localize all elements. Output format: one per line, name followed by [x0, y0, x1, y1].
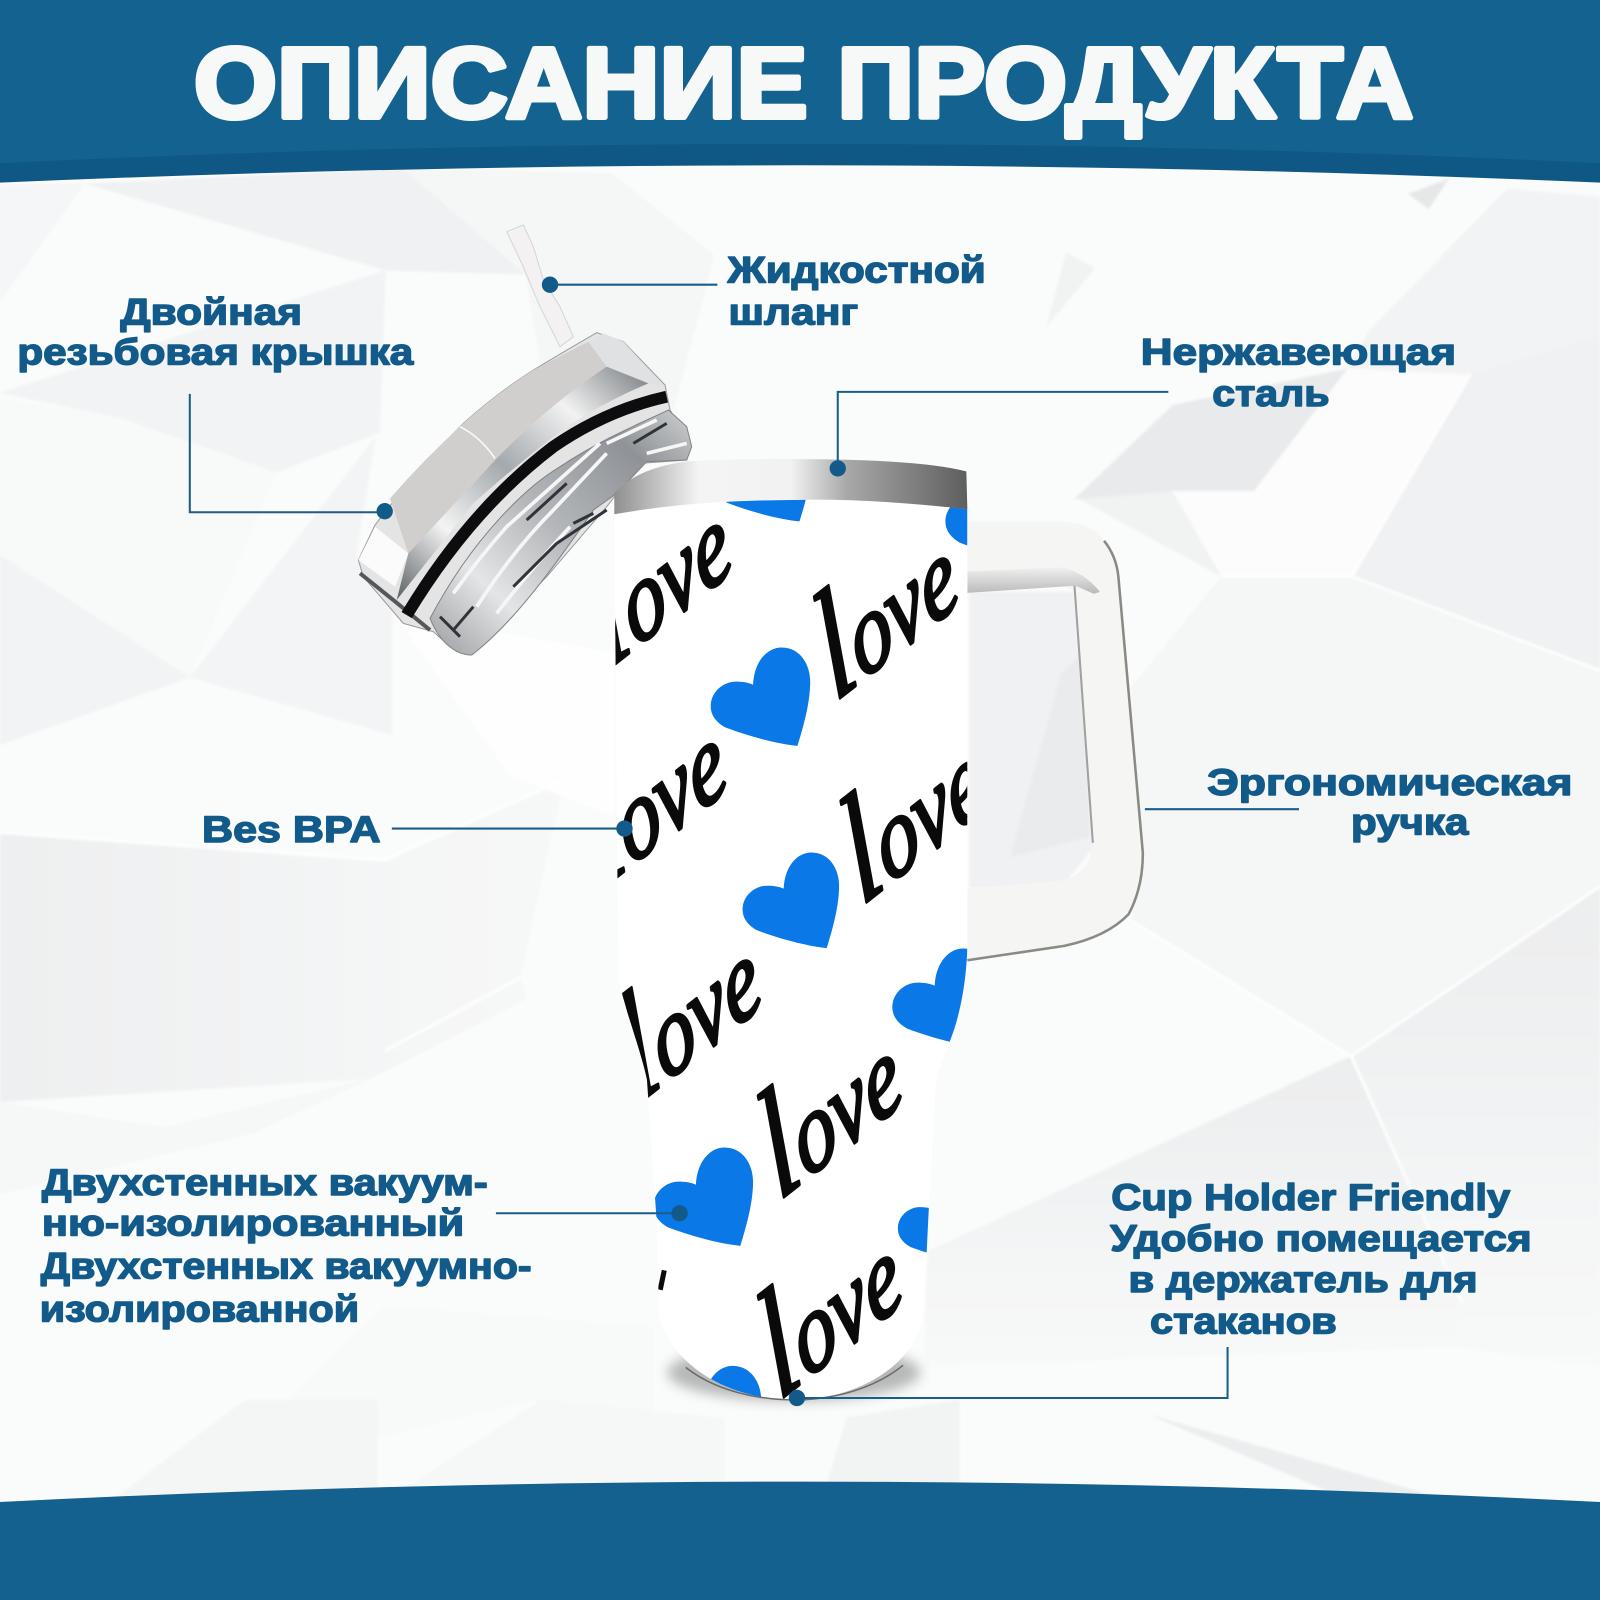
top header band: [0, 0, 1600, 183]
love lettering: love: [568, 444, 747, 700]
heart: [892, 948, 968, 1042]
love lettering: love: [597, 879, 776, 1134]
handle inner edge: [1074, 586, 1093, 843]
lid chrome band: [397, 367, 648, 600]
callout: double threaded lid: [17, 291, 414, 519]
callout: double wall vacuum insulation: Двухстенных вакуумно-: [41, 1246, 532, 1287]
lid seam: [460, 427, 495, 458]
heart: [725, 500, 806, 522]
lid top silver face: [390, 342, 607, 553]
callout: ergonomic handle: [1145, 762, 1572, 843]
handle inner strip: [967, 567, 1100, 594]
print pattern: [563, 423, 1045, 1464]
callout: double threaded lid: резьбовая крышка: [17, 331, 414, 372]
love lettering: love: [563, 663, 742, 918]
heart: [945, 507, 968, 546]
bottom band: [0, 1482, 1600, 1600]
callout: ergonomic handle: Эргономическая: [1207, 762, 1572, 803]
callout: cup holder friendly: [789, 1177, 1532, 1406]
title: ОПИСАНИЕ ПРОДУКТА: [194, 27, 1413, 139]
heart: [743, 853, 839, 948]
callout: double wall vacuum insulation: Двухстенных вакуум-: [42, 1162, 488, 1203]
love lettering: love: [738, 976, 917, 1231]
love lettering: love: [821, 681, 1000, 937]
callout: double threaded lid: Двойная: [120, 291, 302, 332]
base edge line: [686, 1365, 903, 1400]
heart: [898, 1207, 929, 1253]
tumbler handle: [967, 521, 1143, 960]
callout: liquid straw: [542, 250, 986, 332]
callout: stainless steel: сталь: [1212, 373, 1330, 414]
cut-off letter stroke: [660, 1270, 664, 1290]
lid corner highlight: [358, 527, 408, 587]
callout: double wall vacuum insulation: [40, 1162, 688, 1329]
shadow under tumbler: [667, 1344, 920, 1401]
thread dark accents: [440, 423, 667, 637]
lid shadow edge: [360, 573, 430, 630]
callout: double wall vacuum insulation: ню-изолированный: [42, 1203, 464, 1244]
callout: cup holder friendly: Удобно помещается: [1110, 1218, 1532, 1259]
icon: straw: [507, 225, 573, 347]
callout: ergonomic handle: ручка: [1351, 802, 1469, 843]
black seal ring: [407, 397, 667, 615]
callout: cup holder friendly: стаканов: [1150, 1301, 1337, 1342]
clear threaded part: [430, 410, 692, 655]
callout: BPA free: Bes BPA: [202, 809, 381, 850]
handle outer edge: [967, 541, 1143, 960]
heart: [654, 1147, 753, 1246]
heart: [711, 1366, 762, 1397]
callout: liquid straw: шланг: [729, 291, 858, 332]
tumbler steel rim: [614, 459, 967, 514]
callout: double wall vacuum insulation: изолированной: [40, 1288, 359, 1329]
love lettering: love: [738, 1176, 917, 1431]
callout: cup holder friendly: Cup Holder Friendly: [1111, 1177, 1511, 1218]
heart: [711, 647, 810, 746]
callout: cup holder friendly: в держатель для: [1129, 1259, 1478, 1300]
callout: BPA free: [202, 809, 633, 850]
love lettering: love: [794, 477, 973, 732]
thread highlights: [453, 420, 687, 613]
illustration: straw and lid: [358, 225, 692, 655]
callout: stainless steel: [830, 331, 1456, 477]
tumbler body: [615, 500, 968, 1400]
callout: stainless steel: Нержавеющая: [1141, 331, 1456, 372]
lid clear upper edge: [588, 333, 665, 387]
callout: liquid straw: Жидкостной: [726, 250, 986, 291]
lid body: [358, 333, 690, 655]
